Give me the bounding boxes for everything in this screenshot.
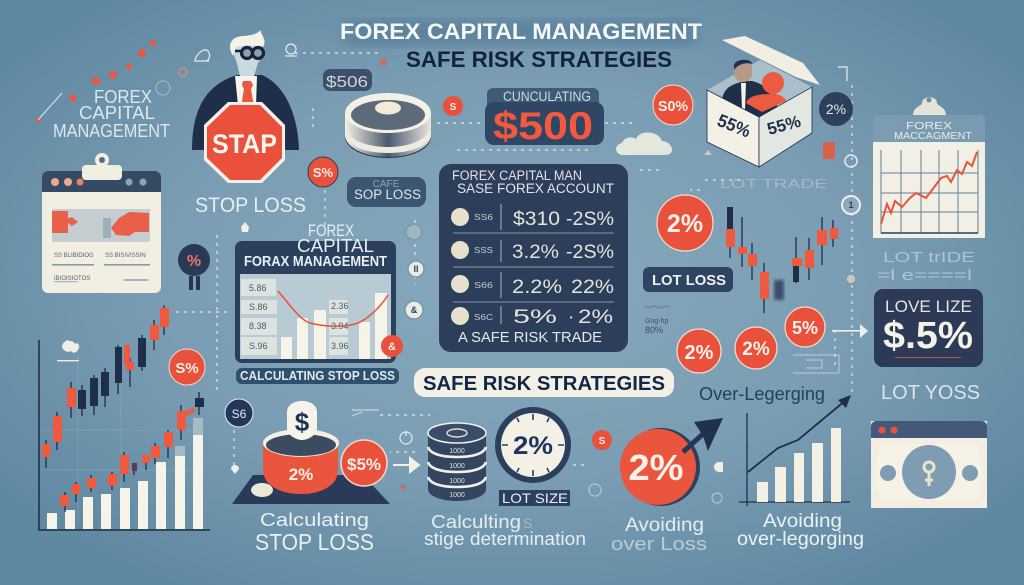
label: avoiding over loss: over Loss: [611, 534, 707, 554]
panel: love lize: $.5%: [883, 315, 973, 357]
row 4: ·: [568, 307, 574, 328]
icon: box with people: 55%: [765, 112, 803, 139]
red trend dots and label: forex capital management: [36, 40, 170, 141]
icon: red cup with dollar tag: 2%: [289, 465, 313, 484]
badge: red square marker: [823, 142, 835, 159]
icon: red 2% target with arrow: [620, 418, 723, 506]
icon: man holding stop sign: [192, 30, 299, 183]
icon: disk stack: 1000: [449, 492, 465, 499]
label: calculating stop loss: Calculating: [260, 510, 369, 530]
badge: 2% lower left: [677, 329, 721, 373]
panel: forax management chart: FORAX MANAGEMENT: [244, 253, 387, 270]
row 2: SSS: [474, 246, 493, 255]
title: [340, 19, 703, 72]
panel: forax management chart: &: [388, 341, 396, 353]
badge: $5%: [341, 440, 387, 486]
badge: 5%: 5%: [792, 318, 818, 338]
icon: box with people: 55%: [715, 110, 754, 141]
small note text: [645, 306, 669, 335]
label: calculating stage determination: [424, 512, 586, 549]
row 3: 22%: [571, 277, 614, 298]
panel: forex management line chart: FOREX: [906, 121, 952, 132]
panel: clipboard report: IBIOISIOTOS: [54, 276, 90, 282]
badge: S% red: S%: [313, 165, 334, 180]
row 4: S6C: [474, 313, 493, 322]
row 3: S66: [474, 281, 494, 290]
icon: red cup with dollar tag: $: [295, 407, 310, 437]
row 4: 2%: [578, 307, 613, 328]
label: faded lot trade upper: LOT TRADE: [720, 176, 827, 191]
pill: lot loss: [643, 267, 733, 292]
badge: 2% large: [657, 195, 713, 251]
red trend dots and label: forex capital management: FOREX: [94, 87, 152, 107]
arrow: to love lize panel: [832, 324, 868, 338]
icon: cloud: [616, 132, 672, 155]
panel: forex management line chart: MACCAGMENT: [894, 131, 972, 142]
icon: clock 2%: 2%: [513, 432, 553, 460]
small note text: 80%: [645, 325, 663, 335]
panel: forax management chart: 2.36: [331, 301, 349, 311]
panel: calculating $500: $500: [493, 105, 593, 148]
panel: clipboard report: [42, 153, 161, 293]
badge: $5%: $5%: [347, 455, 381, 474]
red trend dots and label: forex capital management: CAPITAL: [79, 103, 155, 123]
badge: 50%: S0%: [658, 98, 688, 115]
badge: S% on chart: S%: [175, 360, 199, 377]
badge: 5%: [785, 307, 825, 347]
badge: 2% lower middle: [735, 327, 777, 369]
small nodes: [405, 155, 860, 319]
pill: safe stop loss: CAFE: [373, 179, 400, 190]
panel: forax management chart: S.86: [249, 302, 268, 312]
red trend dots and label: forex capital management: MANAGEMENT: [53, 121, 170, 141]
panel: clipboard report: SS BISIVISSIN: [105, 253, 146, 259]
row 2: 3.2%: [512, 242, 559, 263]
label: lot yoss: LOT YOSS: [881, 382, 980, 404]
label: faded lot trade: [877, 249, 975, 284]
badge: 2% lower middle: 2%: [742, 339, 770, 360]
icon: disk stack: 1000: [449, 448, 465, 455]
badge: S% red: [308, 157, 338, 187]
chart: left candlesticks and bars: [39, 305, 210, 530]
panel: forax management chart: 8.38: [249, 321, 267, 331]
label: avoiding over-legorging: Avoiding: [763, 511, 842, 532]
icon: coin stack: [345, 93, 431, 158]
badge: S% on chart: [169, 349, 205, 385]
row 1: $310: [513, 209, 560, 230]
badge: $50%: $506: [326, 74, 368, 91]
icon: percent pin: [178, 244, 210, 290]
label: stop loss: STOP LOSS: [195, 193, 306, 217]
panel: love lize: [874, 289, 983, 367]
badge: S6 dark: [225, 399, 253, 427]
pill: safe stop loss: SOP LOSS: [354, 187, 421, 202]
panel: calculating $500: [485, 88, 604, 148]
panel: safe risk strategies: SAFE RISK STRATEGIES: [423, 373, 665, 395]
panel: forax management chart: 5.86: [249, 283, 267, 293]
badge: 50%: [653, 85, 693, 125]
chart: over-leveraging bars: [739, 395, 851, 506]
icon: disk stack: [428, 423, 486, 501]
panel: forax management chart: 3.96: [331, 341, 349, 351]
panel: forax management chart: S.96: [249, 341, 268, 351]
badge: small red $: [443, 96, 463, 116]
badge: 2% dark: 2%: [826, 101, 846, 117]
panel: calculating $500: CUNCULATING: [503, 89, 591, 104]
label: calculating stage determination: stige determination: [424, 529, 586, 549]
decorative small icons: [156, 44, 847, 503]
panel: forax management chart: 3.94: [331, 321, 349, 331]
badge: $50%: [323, 69, 372, 91]
row 2: [451, 241, 614, 263]
panel: safe forex account table: [439, 164, 628, 352]
stop sign: STAP: [212, 129, 277, 159]
icon: clock 2%: [495, 407, 571, 483]
pill: lot size: LOT SIZE: [502, 490, 568, 506]
badge: 2% dark: [819, 92, 853, 126]
icon: red cup with dollar tag: [232, 401, 390, 504]
chart: right candlesticks: [726, 207, 838, 313]
pill: calculating stop loss: CALCULATING STOP LOSS: [240, 368, 395, 383]
badge: small red $: S: [450, 102, 457, 113]
label: calculating stage determination: S: [523, 515, 532, 531]
pill: lot loss: LOT LOSS: [652, 272, 726, 289]
panel: safe forex account table: A SAFE RISK TRADE: [458, 330, 602, 346]
label: over-legerging: Over-Legerging: [699, 384, 825, 404]
panel: forax management chart: [235, 221, 403, 363]
icon: red 2% target with arrow: 2%: [628, 447, 684, 488]
text: &: [411, 305, 418, 315]
panel: clipboard report: SS BLIBIDIOG: [54, 253, 94, 259]
label: calculating stop loss: STOP LOSS: [255, 529, 374, 555]
row 4: [451, 307, 613, 328]
panel: love lize: LOVE LIZE: [885, 297, 972, 316]
icon: banknote window: [871, 421, 987, 508]
candles: [46, 305, 199, 512]
text: II: [413, 264, 419, 274]
panel: safe risk strategies: [414, 368, 674, 397]
icon: box with people: [707, 36, 820, 167]
label: calculating stop loss: [255, 510, 374, 555]
row 3: 2.2%: [512, 277, 562, 298]
panel: forex management line chart: [873, 97, 985, 238]
icon: disk stack: 1000: [449, 463, 465, 470]
row 1: -2S%: [566, 209, 614, 230]
text: 1: [848, 200, 854, 210]
badge: small red: S: [599, 436, 606, 447]
badge: S6 dark: S6: [232, 407, 247, 421]
label: calculating stage determination: Calculting: [431, 512, 521, 532]
small note text: Gog-hp: [645, 318, 668, 325]
icon: percent pin: %: [187, 253, 201, 270]
title: SAFE RISK STRATEGIES: [406, 47, 672, 72]
row 3: [451, 275, 614, 298]
badge: small red: [592, 430, 612, 450]
row 4: 5%: [513, 307, 557, 328]
panel: forax management chart: FOREX: [308, 221, 354, 240]
panel: safe forex account table: FOREX CAPITAL MAN: [452, 168, 582, 183]
row 2: -2S%: [566, 242, 614, 263]
pill: safe stop loss: [347, 177, 426, 207]
label: avoiding over loss: Avoiding: [625, 515, 704, 536]
bars: [47, 435, 203, 529]
connector dashes: [176, 53, 852, 465]
row 1: [451, 208, 614, 230]
stop sign: [204, 102, 285, 183]
row 1: SS6: [474, 213, 494, 222]
label: avoiding over-legorging: over-legorging: [737, 529, 864, 550]
icon: disk stack: 1000: [449, 478, 465, 485]
panel: forax management chart: CAPITAL: [297, 236, 374, 256]
panel: safe forex account table: SASE FOREX ACCOUNT: [457, 181, 614, 196]
arrow: to disks: [393, 458, 419, 472]
badge: 2% large: 2%: [667, 210, 703, 238]
label: avoiding over-legorging: [737, 511, 864, 550]
label: faded lot trade: =l e====l: [877, 267, 972, 284]
title: FOREX CAPITAL MANAGEMENT: [340, 19, 703, 44]
label: avoiding over loss: [611, 515, 707, 554]
label: faded lot trade: LOT trIDE: [883, 249, 975, 266]
badge: 2% lower left: 2%: [685, 342, 714, 364]
